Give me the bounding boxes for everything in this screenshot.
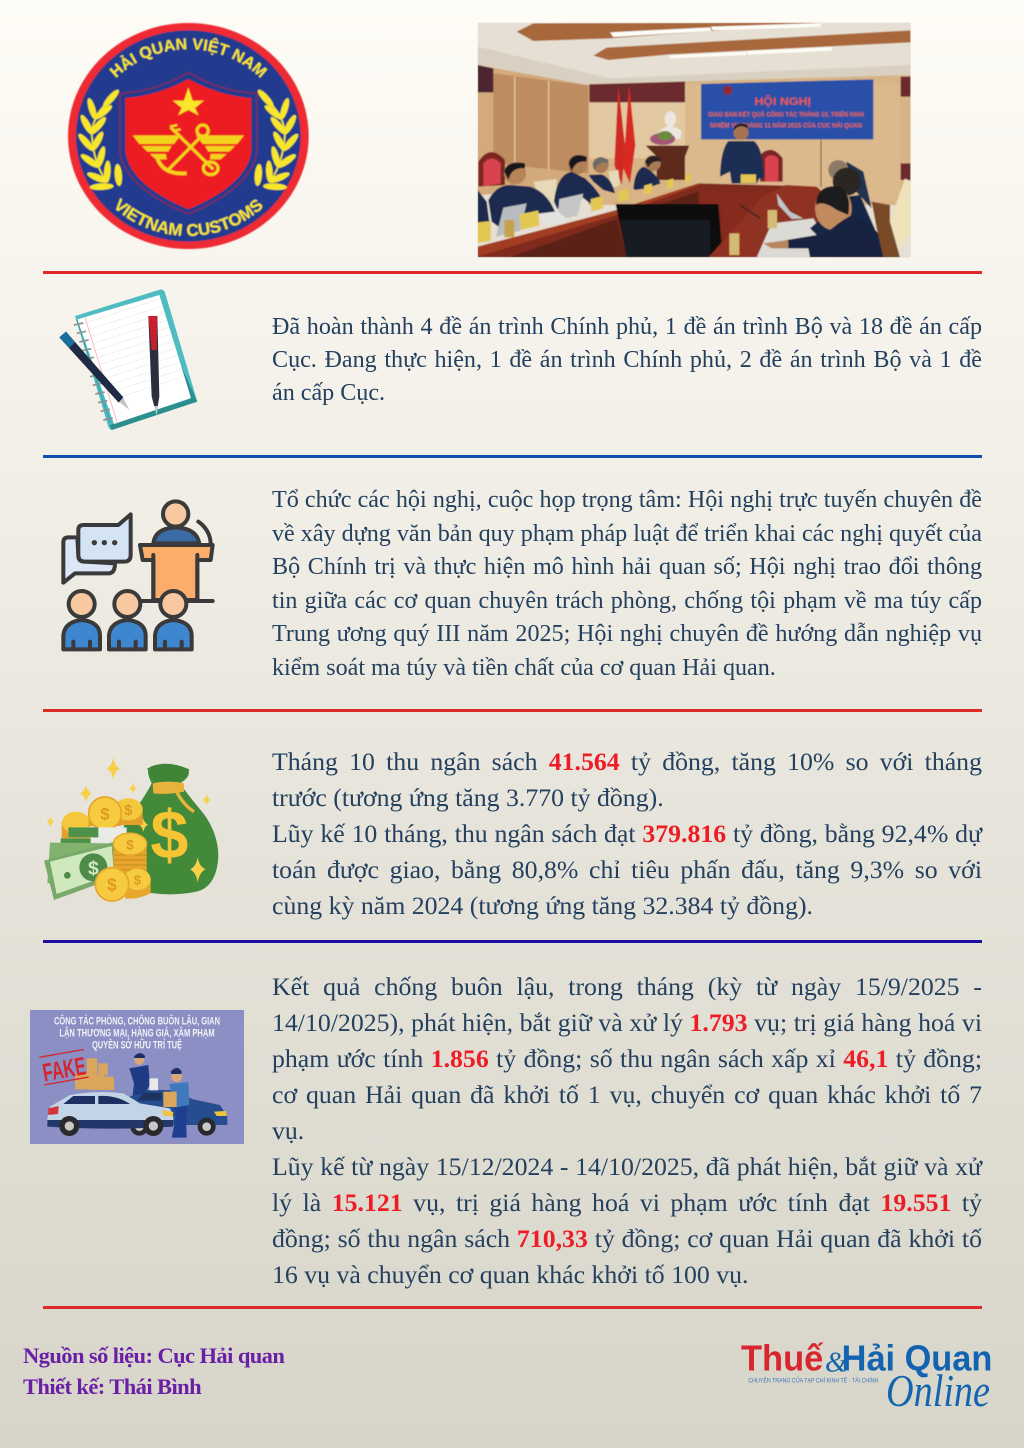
divider line red (43, 1306, 982, 1309)
text block: budget revenue: Tháng 10 thu ngân sách 41.564 tỷ đồng, tăng 10% so với tháng (272, 747, 982, 776)
text block: conferences: Tổ chức các hội nghị, cuộc họp trọng tâm: Hội nghị trực tuyến chuyên đề (272, 487, 982, 513)
text block: anti-smuggling results: vụ. (272, 1116, 304, 1145)
photo: conference meeting room: NHIỆM VỤ THÁNG 11 NĂM 2025 CỦA CỤC HẢI QUAN (710, 120, 862, 129)
banner (701, 79, 873, 139)
icon: Vietnam Customs emblem (67, 22, 310, 250)
text block: anti-smuggling results: đồng; số thu ngân sách 710,33 tỷ đồng; cơ quan Hải quan đã khởi tố (272, 1224, 982, 1253)
text block: conferences: Trung ương quý III năm 2025; Hội nghị chuyên đề hướng dẫn nghiệp vụ (272, 621, 982, 647)
light blue car (47, 1092, 173, 1125)
text block: budget revenue: Lũy kế 10 tháng, thu ngân sách đạt 379.816 tỷ đồng, bằng 92,4% dự (272, 819, 982, 848)
icon: speaker at podium with audience (61, 499, 215, 652)
photo: conference meeting room (478, 22, 911, 258)
text block: anti-smuggling results (272, 972, 983, 1289)
footer: source and design credits: Thiết kế: Thái Bình (23, 1374, 201, 1399)
standing speaker (733, 125, 749, 140)
text block: budget revenue: cùng kỳ năm 2024 (tương ứng tăng 32.384 tỷ đồng). (272, 891, 813, 920)
sparkles (47, 757, 210, 883)
front coins: $ (134, 873, 142, 888)
icon: notebook and pens (59, 289, 198, 430)
dollar sign on bag: $ (150, 797, 188, 873)
logo: Thuế & Hải Quan Online: Hải Quan (842, 1338, 992, 1379)
text block: conferences: tin giữa các cơ quan chuyên trách phòng, chống tội phạm về ma túy cấp (272, 588, 982, 614)
divider line red (43, 709, 982, 712)
FAKE stamp (39, 1049, 89, 1088)
logo: Thuế & Hải Quan Online (741, 1338, 992, 1416)
right laurel (254, 88, 300, 191)
blue pen (59, 332, 129, 410)
right seated officers (847, 162, 872, 208)
front coins: $ (126, 836, 134, 852)
flags (614, 85, 625, 185)
text block: project completion (272, 314, 982, 406)
left seated officers (504, 162, 526, 184)
photo: conference meeting room: GIAO BAN KẾT QUẢ CÔNG TÁC THÁNG 10, TRIỂN KHAI (708, 109, 864, 119)
bust and flowers (665, 111, 676, 127)
icon: Vietnam Customs emblem: VIETNAM CUSTOMS (115, 197, 263, 237)
chairs (478, 152, 505, 187)
banknotes (44, 827, 127, 900)
dark blue car (123, 1090, 227, 1125)
text block: budget revenue: toán được giao, bằng 80,8% chỉ tiêu phấn đấu, tăng 9,3% so với (272, 855, 982, 884)
text block: anti-smuggling results: lý là 15.121 vụ, trị giá hàng hoá vi phạm ước tính đạt 19.551 tỷ (272, 1188, 982, 1217)
footer: source and design credits: Nguồn số liệu: Cục Hải quan (23, 1343, 284, 1368)
text block: anti-smuggling results: 14/10/2025), phát hiện, bắt giữ và xử lý 1.793 vụ; trị giá hàng hoá vi (272, 1008, 982, 1037)
text block: anti-smuggling results: Lũy kế từ ngày 15/12/2024 - 14/10/2025, đã phát hiện, bắt giữ và xử (272, 1152, 982, 1181)
coin stacks (62, 797, 143, 842)
left laurel (76, 88, 123, 191)
monitor (616, 204, 722, 257)
icon: money bag, coins and banknotes (44, 758, 218, 902)
red pen (148, 316, 159, 416)
text block: anti-smuggling results: phạm ước tính 1.856 tỷ đồng; số thu ngân sách xấp xỉ 46,1 tỷ đồng; (272, 1044, 982, 1073)
footer: source and design credits (23, 1343, 285, 1399)
coin stacks: $ (124, 803, 132, 819)
icon: Vietnam Customs emblem: HẢI QUAN VIỆT NAM (108, 37, 268, 78)
divider line navy (43, 940, 982, 943)
coin stacks: $ (100, 804, 110, 823)
text block: conferences (272, 487, 982, 680)
illustration: anti-smuggling banner (30, 1010, 244, 1144)
boxes on roof (75, 1058, 114, 1090)
logo: Thuế & Hải Quan Online: Thuế (741, 1338, 824, 1379)
text block: conferences: Bộ Chính trị và thực hiện mô hình hải quan số; Hội nghị trao đổi thông (272, 554, 982, 580)
text block: project completion: án cấp Cục. (272, 380, 385, 406)
laptops and name plates (496, 203, 527, 237)
divider line blue (43, 455, 982, 458)
text block: anti-smuggling results: cơ quan Hải quan đã khởi tố 1 vụ, chuyển cơ quan khác khởi tố 7 (272, 1080, 982, 1109)
text block: budget revenue (272, 747, 983, 920)
text block: budget revenue: trước (tương ứng tăng 3.770 tỷ đồng). (272, 783, 664, 812)
customs officer with box (163, 1068, 189, 1138)
table and floor (478, 183, 785, 257)
right table top with papers (708, 184, 822, 258)
text block: project completion: Đã hoàn thành 4 đề án trình Chính phủ, 1 đề án trình Bộ và 18 đề án cấp (272, 314, 982, 340)
logo: Thuế & Hải Quan Online: CHUYÊN TRANG CỦA TẠP CHÍ KINH TẾ - TÀI CHÍNH (748, 1376, 878, 1384)
divider line red (43, 271, 982, 274)
text block: anti-smuggling results: 16 vụ và chuyển cơ quan khác khởi tố 100 vụ. (272, 1260, 748, 1289)
customs officer with clipboard (129, 1053, 158, 1095)
illustration: anti-smuggling banner: QUYỀN SỞ HỮU TRÍ TUỆ (92, 1039, 182, 1052)
banknotes: $ (88, 858, 99, 879)
photo: conference meeting room: HỘI NGHỊ (754, 95, 811, 108)
front coins (95, 833, 151, 901)
text block: conferences: kiểm soát ma túy và tiền chất của cơ quan Hải quan. (272, 654, 776, 680)
text block: project completion: Cục. Đang thực hiện, 1 đề án trình Chính phủ, 2 đề án trình Bộ và 1 đề (272, 347, 982, 373)
logo: Thuế & Hải Quan Online: Online (886, 1366, 990, 1416)
text block: anti-smuggling results: Kết quả chống buôn lậu, trong tháng (kỳ từ ngày 15/9/2025 - (272, 972, 982, 1001)
logo: Thuế & Hải Quan Online: & (825, 1348, 847, 1379)
text block: conferences: về xây dựng văn bản quy phạm pháp luật để triển khai các nghị quyết của (272, 520, 982, 546)
back wall (588, 75, 911, 205)
front coins: $ (107, 875, 117, 895)
FAKE stamp: FAKE (41, 1052, 88, 1087)
